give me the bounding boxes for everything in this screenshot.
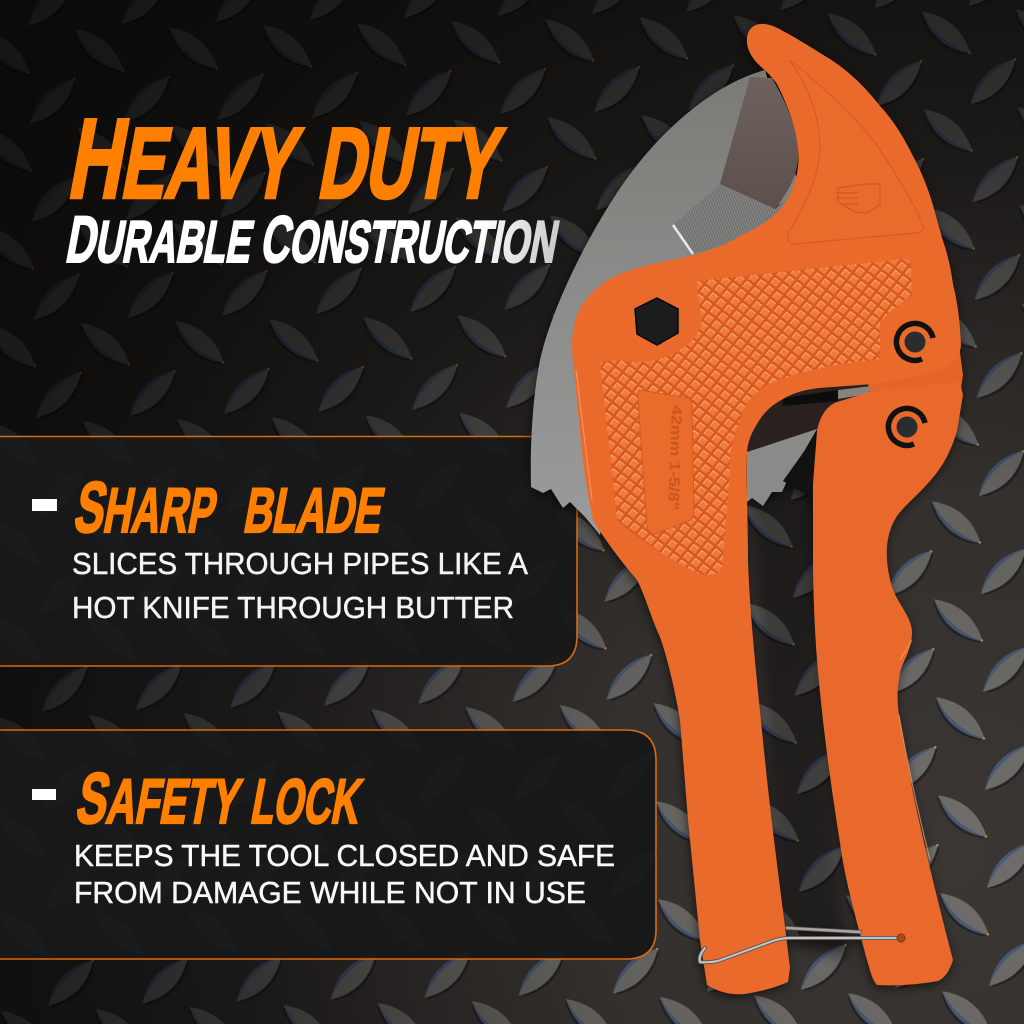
heading: safety lock: SAFETY (71, 759, 248, 839)
right handle (813, 382, 963, 985)
wire safety lock (700, 928, 905, 962)
subtitle: durable construction: DURABLE (61, 204, 260, 277)
hex bolt (635, 298, 678, 345)
icon: hand logo (836, 184, 880, 213)
hinge joint fill (868, 330, 963, 395)
text: sharp blade description (72, 547, 529, 625)
upper body with jaw and left handle (572, 24, 961, 994)
size label inset: 42mm 1-5/8" (664, 405, 685, 510)
bullet dash: sharp blade (32, 499, 57, 511)
heading: sharp blade (69, 468, 389, 548)
pipe cutter tool (531, 24, 963, 994)
title: heavy duty: DUTY (312, 108, 511, 219)
text: sharp blade description: HOT KNIFE THROUGH BUTTER (72, 591, 514, 625)
panel: safety lock (0, 730, 656, 959)
title: heavy duty: HEAVY (61, 96, 311, 222)
handle gap shadow (745, 420, 850, 960)
upper blade (531, 70, 800, 535)
text: safety lock description (74, 838, 615, 910)
text: sharp blade description: SLICES THROUGH PIPES LIKE A (72, 547, 529, 581)
text: safety lock description: FROM DAMAGE WHILE NOT IN USE (74, 875, 586, 910)
heading: sharp blade: SHARP (69, 468, 224, 548)
raised jaw panel (788, 60, 923, 244)
textured grip (600, 259, 912, 575)
panel: sharp blade (0, 436, 577, 666)
pivot clip upper (896, 323, 933, 360)
subtitle: durable construction (61, 204, 565, 277)
lower blade and spring (747, 382, 880, 506)
size label inset (638, 390, 694, 534)
subtitle: durable construction: CONSTRUCTION (256, 204, 565, 277)
heading: sharp blade: BLADE (239, 475, 389, 546)
text: safety lock description: KEEPS THE TOOL CLOSED AND SAFE (74, 838, 615, 873)
heading: safety lock: LOCK (246, 766, 368, 837)
bullet dash: safety lock (32, 789, 56, 800)
handle highlights (576, 370, 930, 860)
pivot clip lower (888, 408, 925, 445)
